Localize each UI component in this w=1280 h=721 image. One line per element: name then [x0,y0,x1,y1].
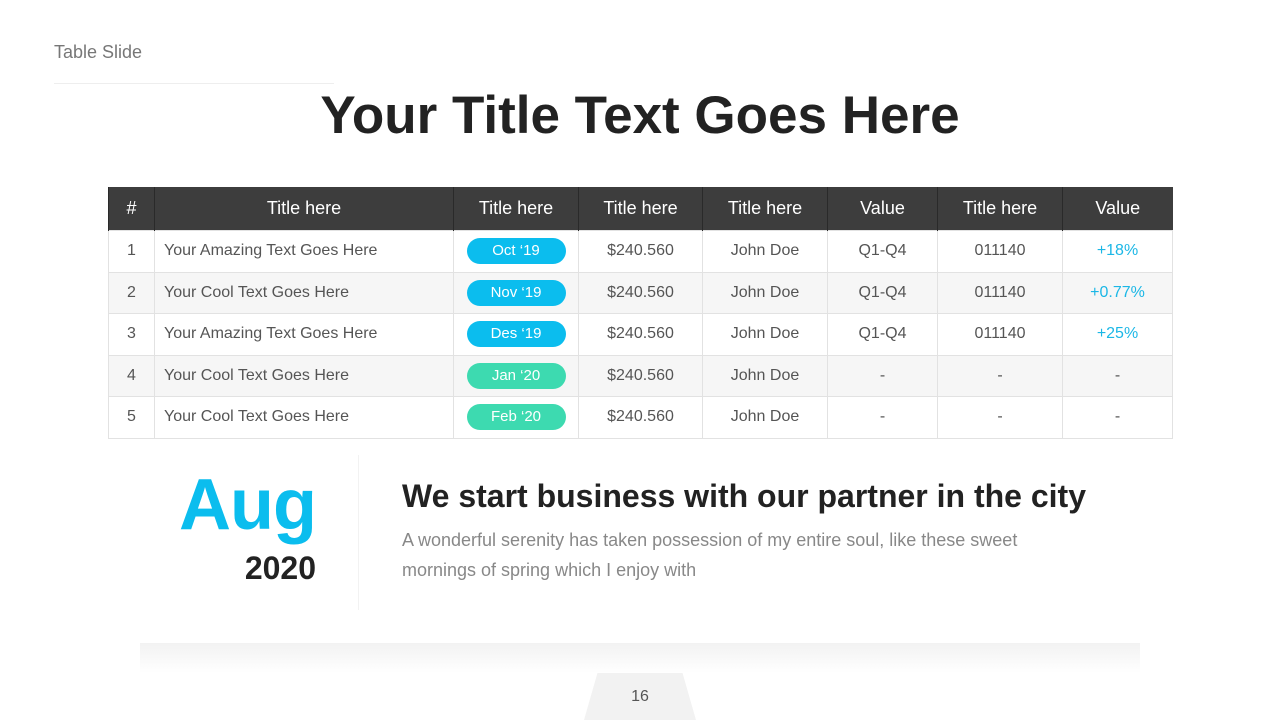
table: +18% [1097,242,1138,259]
table: Q1-Q4 [858,325,906,342]
table: Value [860,198,905,218]
page number: 16 [631,688,649,705]
page number [584,673,696,720]
table: Title here [267,198,341,218]
table: John Doe [731,325,799,342]
table: Q1-Q4 [858,284,906,301]
table: John Doe [731,367,799,384]
body text: A wonderful serenity has taken possession of my entire soul, like these sweet mornings of spring which I enjoy with [402,530,1017,580]
table: Title here [479,198,553,218]
table: 011140 [974,284,1026,301]
table: Q1-Q4 [858,242,906,259]
table: John Doe [731,284,799,301]
panel shadow [140,643,1140,673]
date block: 2020 [245,550,316,586]
table: Des ‘19 [491,325,541,342]
date block: Aug [179,465,316,545]
table: - [880,408,885,425]
table: - [1115,408,1120,425]
table: John Doe [731,242,799,259]
table: 3 [127,325,136,342]
table: - [1115,367,1120,384]
table: Oct ‘19 [492,242,540,259]
heading: We start business with our partner in the city [402,478,1086,514]
table: 011140 [974,242,1026,259]
table: +0.77% [1090,284,1145,301]
table: +25% [1097,325,1138,342]
table: Your Cool Text Goes Here [164,367,349,384]
table: # [126,198,136,218]
table: Nov ‘19 [491,284,541,301]
table: $240.560 [607,325,674,342]
table: $240.560 [607,284,674,301]
title: Your Title Text Goes Here [320,86,960,145]
table: Your Cool Text Goes Here [164,408,349,425]
table: Feb ‘20 [491,408,541,425]
table: Value [1095,198,1140,218]
table [108,187,1173,439]
table: $240.560 [607,367,674,384]
label: table slide: Table Slide [54,42,142,62]
table: John Doe [731,408,799,425]
table: 2 [127,284,136,301]
table: - [997,367,1003,384]
table: Title here [728,198,802,218]
table: 4 [127,367,136,384]
table: Jan ‘20 [492,367,540,384]
date block [179,465,316,586]
table: Your Cool Text Goes Here [164,284,349,301]
table: $240.560 [607,242,674,259]
table: $240.560 [607,408,674,425]
table: 1 [127,242,136,259]
table: Title here [603,198,678,218]
table: Your Amazing Text Goes Here [164,325,377,342]
table: - [997,408,1003,425]
table: Title here [963,198,1037,218]
table: Your Amazing Text Goes Here [164,242,377,259]
table: 011140 [974,325,1026,342]
table: - [880,367,885,384]
table: 5 [127,408,136,425]
